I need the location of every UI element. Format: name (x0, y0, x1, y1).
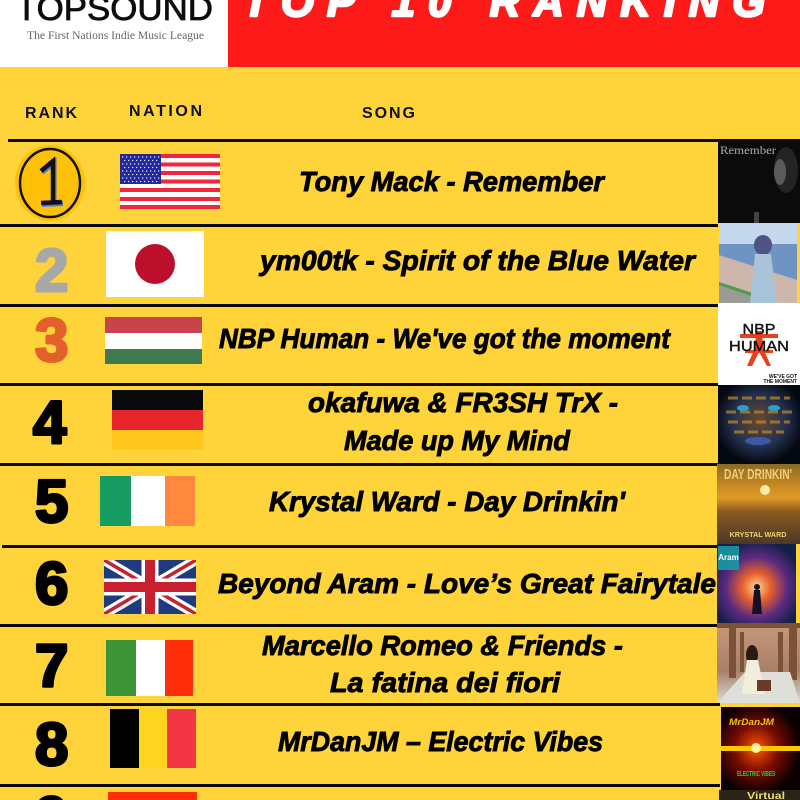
album art: Day Drinkin' (717, 464, 800, 544)
album art: Love's Great Fairytale: Aram (718, 553, 739, 562)
flag: Ireland (100, 476, 195, 526)
header: rank: RANK (25, 105, 77, 122)
rank 6: 6 (35, 550, 68, 617)
album art: NBP Human: WE'VE GOT (769, 374, 797, 380)
flag: Belgium (110, 709, 196, 768)
flag: Italy (106, 640, 193, 696)
rank 2: 2 (35, 237, 68, 304)
flag: Japan (106, 231, 204, 297)
album art: Love's Great Fairytale (717, 544, 796, 623)
song 1: Tony Mack - Remember (299, 166, 606, 197)
row 6 (35, 544, 796, 623)
song 4: okafuwa & FR3SH TrX - (308, 387, 618, 418)
flag: United Kingdom (104, 560, 196, 614)
header: nation: NATION (129, 103, 202, 120)
album art: Spirit of the Blue Water (719, 224, 797, 303)
album art: La fatina dei fiori (717, 623, 800, 703)
row 5 (35, 464, 800, 544)
column headers (25, 103, 415, 122)
header: song: SONG (362, 105, 415, 122)
album art: NBP Human: HUMAN (729, 338, 789, 355)
flag: row 9 (108, 792, 197, 800)
logo tagline: The First Nations Indie Music League (27, 28, 204, 42)
album art: Electric Vibes: MrDanJM (729, 717, 775, 727)
album art: NBP Human: NBP (742, 321, 776, 338)
album art: Remember (718, 142, 800, 223)
album art: Electric Vibes (721, 707, 800, 790)
row 4 (33, 385, 800, 464)
album art: Remember: Remember (720, 143, 776, 157)
song 4 (308, 387, 618, 456)
rank 7: 7 (35, 632, 68, 699)
row 2 (35, 224, 797, 304)
song 8: MrDanJM – Electric Vibes (278, 726, 603, 757)
album art: Virtual (719, 790, 800, 800)
row 7 (35, 623, 800, 703)
song 7: La fatina dei fiori (330, 667, 561, 698)
flag: Hungary (105, 317, 202, 364)
album art: Electric Vibes: ELECTRIC VIBES (737, 771, 775, 778)
rank 8: 8 (35, 711, 68, 778)
album art: NBP Human: THE MOMENT (763, 379, 797, 385)
song 5: Krystal Ward - Day Drinkin' (269, 486, 626, 517)
rank 5: 5 (35, 468, 68, 535)
row 8 (35, 707, 800, 790)
song 3: NBP Human - We've got the moment (219, 323, 672, 354)
row 3 (35, 303, 800, 385)
rank 1 badge (15, 145, 85, 221)
album art: Made up My Mind (718, 385, 800, 464)
row 1 (15, 142, 800, 223)
logo panel (0, 0, 228, 67)
song 6: Beyond Aram - Love’s Great Fairytale (218, 568, 716, 599)
song 7 (262, 630, 623, 698)
album art: Day Drinkin': KRYSTAL WARD (730, 530, 787, 539)
song 2: ym00tk - Spirit of the Blue Water (258, 245, 697, 276)
title banner (228, 0, 800, 67)
song 7: Marcello Romeo & Friends - (262, 630, 623, 661)
song 4: Made up My Mind (344, 425, 571, 456)
album art: NBP Human (718, 303, 800, 385)
flag: USA (120, 154, 220, 209)
rank 4: 4 (33, 389, 67, 456)
flag: Germany (112, 390, 203, 450)
rank 3: 3 (35, 307, 68, 374)
